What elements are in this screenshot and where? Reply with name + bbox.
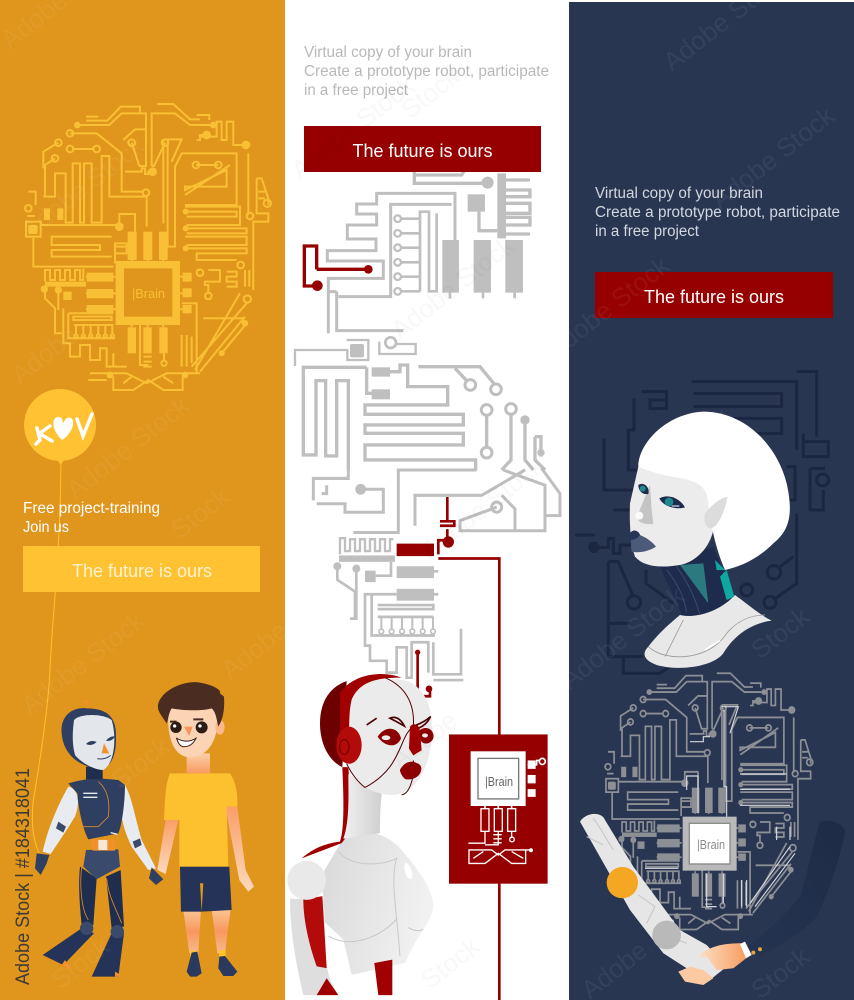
panel: red brain chip: [449, 734, 548, 884]
watermark: faint stock text: Stock: [745, 600, 816, 665]
circuit: navy dark background: [575, 372, 829, 673]
collar: [645, 595, 772, 668]
text block: free project: [23, 500, 160, 536]
circuit: white panel lower: [313, 468, 560, 680]
text block: white panel copy: Create a prototype robot, participate: [304, 63, 549, 80]
robot arms: [43, 787, 78, 854]
torso: [322, 831, 433, 975]
arm: [290, 899, 338, 995]
robot: white panel bust: [287, 674, 434, 995]
button: yellow future: The future is ours: [72, 561, 212, 581]
chip: navy panel: [645, 707, 795, 907]
watermark: faint stock text white panel: Stock: [395, 60, 466, 125]
neck: [660, 547, 733, 616]
headphone: [336, 727, 362, 764]
robot right leg: [106, 870, 124, 928]
text block: free project: Join us: [23, 519, 69, 536]
watermark: faint stock text white panel: Adobe Stock: [285, 70, 421, 185]
watermark: faint stock text: Stock: [665, 400, 736, 465]
robot child: walking robot: [35, 700, 163, 977]
robot arm: [580, 814, 727, 980]
boy character: [157, 682, 254, 977]
text block: navy panel copy: Virtual copy of your brain: [595, 185, 763, 202]
watermark: faint stock text: Adobe Stock: [15, 605, 151, 720]
text block: white panel copy: in a free project: [304, 82, 409, 99]
circuit: white panel upper: [295, 163, 545, 470]
watermark: faint stock text: Adobe Stock: [705, 100, 841, 215]
watermark id: vertical stock text: Adobe Stock | #184318041: [12, 768, 34, 985]
circuit: red trunk line: [397, 497, 499, 1000]
red shoulder strip: [302, 767, 353, 858]
button: red future navy panel: [595, 272, 833, 318]
boy head: [187, 753, 210, 773]
watermark: faint stock text white panel: Adobe Stock: [385, 230, 521, 345]
text block: navy panel copy: Create a prototype robot, participate: [595, 204, 840, 221]
watermark: faint stock text: Stock: [45, 930, 116, 995]
watermark: faint stock text: Stock: [105, 730, 176, 795]
watermark: faint stock text: Adobe Stock: [15, 130, 151, 245]
watermark: faint stock text white panel: Stock: [415, 930, 486, 995]
button: red future white panel: [304, 126, 541, 172]
circuit brain: navy panel: [605, 673, 813, 930]
chip label: red panel: |Brain: [485, 775, 513, 789]
text block: free project: Free project-training: [23, 500, 160, 517]
watermark: faint stock text: Adobe Stock: [60, 390, 196, 505]
boy shirt: [164, 773, 237, 867]
icon: balloon: [24, 389, 96, 853]
text block: white panel copy: [304, 44, 549, 99]
watermark: faint stock text white panel: Adobe Stock: [415, 450, 551, 565]
button: red future white panel: The future is ours: [352, 141, 492, 161]
robot hips: [83, 849, 120, 879]
face: [347, 679, 432, 795]
lips: [629, 531, 656, 552]
watermark: faint stock text white panel: Adobe: [385, 705, 463, 775]
robot neck and head: [86, 767, 103, 779]
circuit: red accent upper: [304, 246, 373, 291]
robot: navy panel head: [629, 412, 790, 668]
button: red future navy panel: The future is ours: [644, 287, 784, 307]
watermark: faint stock text: Adobe: [215, 615, 293, 685]
eyes: [638, 484, 649, 494]
handshake arms: [580, 814, 845, 985]
chip label: navy panel: |Brain: [697, 838, 725, 852]
circuit brain: orange panel: [25, 104, 271, 390]
face: [630, 467, 713, 567]
button: yellow future: [23, 546, 260, 592]
text block: navy panel copy: [595, 185, 840, 240]
boy legs: [183, 910, 201, 953]
boy shoes: [187, 952, 202, 977]
panel: navy background: [569, 2, 854, 1000]
sleeve: [747, 821, 845, 957]
watermark: faint stock text: Adobe: [5, 320, 83, 390]
eyes, nose, lips: [378, 729, 401, 745]
boy shorts: [180, 867, 232, 912]
watermark: faint stock text: Stock: [165, 480, 236, 545]
neck: [343, 774, 382, 839]
robot hand: [678, 967, 713, 985]
robot torso: [68, 778, 125, 839]
watermark: faint stock text: Adobe Stock: [540, 250, 676, 365]
human hand: [698, 943, 748, 970]
chip label: orange panel: |Brain: [132, 287, 165, 301]
watermark: faint stock text white panel: [285, 60, 551, 995]
boy arms: [157, 820, 178, 874]
hair: [320, 681, 347, 767]
ear: [704, 497, 728, 528]
watermark: faint stock text: Adobe Stock: [555, 580, 691, 695]
hair: [638, 412, 790, 570]
panel: white background: [285, 0, 569, 1000]
robot left leg: [79, 867, 97, 925]
panel: orange background: [0, 0, 285, 1000]
text block: navy panel copy: in a free project: [595, 223, 700, 240]
text block: white panel copy: Virtual copy of your brain: [304, 44, 472, 61]
